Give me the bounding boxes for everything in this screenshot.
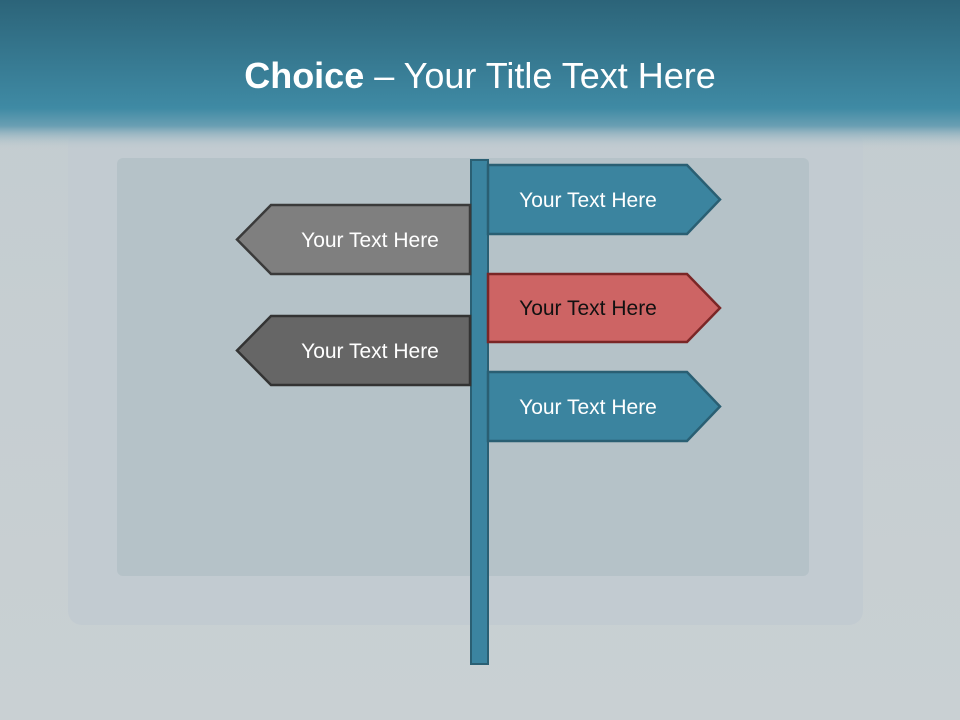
sign: left bottom: Your Text Here bbox=[301, 340, 439, 363]
sign: right red: Your Text Here bbox=[519, 297, 657, 320]
sign: right red bbox=[488, 274, 720, 342]
sign: right top bbox=[488, 165, 720, 234]
sign: right top: Your Text Here bbox=[519, 189, 657, 212]
sign: right bottom: Your Text Here bbox=[519, 396, 657, 419]
title: Choice – Your Title Text Here bbox=[244, 55, 716, 96]
sign: right bottom bbox=[488, 372, 720, 441]
signpost pole bbox=[471, 160, 488, 664]
tablet background bbox=[68, 130, 863, 625]
sign: left bottom bbox=[237, 316, 470, 385]
header band bbox=[0, 0, 960, 150]
sign: left top: Your Text Here bbox=[301, 229, 439, 252]
sign: left top bbox=[237, 205, 470, 274]
